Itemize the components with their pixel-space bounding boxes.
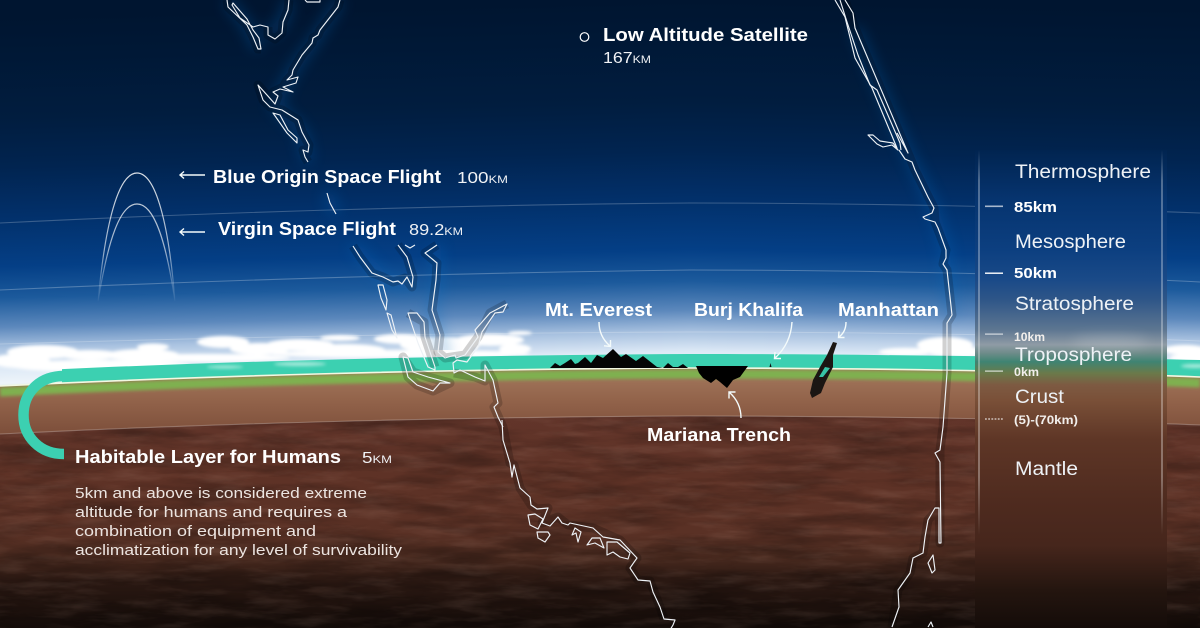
scale: (5)-(70km): (5)-(70km) xyxy=(1014,415,1078,427)
label: Blue Origin Space Flight: Blue Origin Space Flight xyxy=(213,167,441,187)
heading: Habitable Layer for Humans: 5km xyxy=(362,450,392,467)
arrow: Burj Khalifa xyxy=(774,322,792,358)
label: Virgin Space Flight: 89.2 km xyxy=(409,222,463,239)
atlantic coast strands xyxy=(835,0,952,627)
scale: 85km: 85km xyxy=(1014,199,1057,216)
scale: 10km: 10km xyxy=(1014,332,1045,344)
scale: 0km: 0km xyxy=(1014,367,1039,379)
panel borders xyxy=(978,150,1163,535)
label: Burj Khalifa: Burj Khalifa xyxy=(694,300,804,320)
Burj Khalifa silhouette xyxy=(770,363,772,367)
cloud wisps over band xyxy=(207,362,1200,368)
scale: 10km xyxy=(985,332,1045,344)
habitable layer arc xyxy=(24,376,64,454)
text block: extreme altitude note xyxy=(75,486,403,559)
flight arcs xyxy=(98,173,175,302)
Mariana Trench silhouette xyxy=(696,366,748,388)
arrow: Virgin xyxy=(180,228,205,236)
text block: extreme altitude note: combination of equipment and xyxy=(75,524,316,540)
altitude lines xyxy=(0,203,1200,434)
label: Manhattan: Manhattan xyxy=(838,300,939,320)
arrow: Everest xyxy=(599,322,610,346)
label: Virgin Space Flight: Virgin Space Flight xyxy=(218,219,396,239)
scale: 50km: 50km xyxy=(1014,265,1057,282)
mantle xyxy=(0,416,1200,628)
arrow: Mariana Trench xyxy=(729,392,741,418)
text block: extreme altitude note: acclimatization for any level of survivability xyxy=(75,543,403,559)
scale: (5)-(70km) xyxy=(985,415,1078,427)
clouds xyxy=(0,331,1200,372)
label: Mt. Everest: Mt. Everest xyxy=(545,300,652,320)
green surface strip xyxy=(0,374,1200,392)
frosted panel backdrop xyxy=(975,150,1167,628)
Mt. Everest silhouette xyxy=(550,349,688,368)
coastline outline of the Americas xyxy=(227,0,952,628)
panel: atmosphere layer scale xyxy=(975,150,1167,628)
icon: satellite marker xyxy=(580,33,589,41)
label: Blue Origin Space Flight: 100 km xyxy=(457,170,508,187)
scale: 50km xyxy=(985,265,1057,282)
scale: 85km xyxy=(985,199,1057,216)
label: Low Altitude Satellite xyxy=(603,25,808,67)
heading: Habitable Layer for Humans: Habitable Layer for Humans xyxy=(75,447,341,467)
upper coast xyxy=(227,0,340,214)
arrow: Blue Origin xyxy=(180,172,205,178)
coastline halo xyxy=(227,0,952,627)
scale: Crust: Crust xyxy=(1015,387,1065,408)
arrow: Manhattan xyxy=(838,322,846,338)
Manhattan silhouette xyxy=(810,342,837,398)
coastline glow xyxy=(227,0,952,358)
text block: extreme altitude note: altitude for humans and requires a xyxy=(75,505,348,521)
label: Virgin Space Flight xyxy=(218,219,463,239)
earth crust xyxy=(0,368,1200,628)
scale: 0km xyxy=(985,367,1039,379)
south american coast xyxy=(502,420,675,628)
central america coast xyxy=(353,245,507,427)
scale: Stratosphere: Stratosphere xyxy=(1015,294,1134,315)
label: Low Altitude Satellite: Low Altitude Satellite xyxy=(603,25,808,45)
scale: Mesosphere: Mesosphere xyxy=(1015,232,1126,253)
scale: Troposphere: Troposphere xyxy=(1015,345,1132,366)
sky gradient xyxy=(0,0,1200,400)
bright surface line xyxy=(0,368,1200,386)
scale: Thermosphere: Thermosphere xyxy=(1015,162,1151,183)
text block: extreme altitude note: 5km and above is considered extreme xyxy=(75,486,367,502)
teal habitable band xyxy=(62,354,1200,382)
rock texture xyxy=(0,416,1200,628)
scale: Mantle: Mantle xyxy=(1015,459,1078,480)
label: Low Altitude Satellite: 167km xyxy=(603,50,651,67)
label: Mariana Trench: Mariana Trench xyxy=(647,425,791,445)
